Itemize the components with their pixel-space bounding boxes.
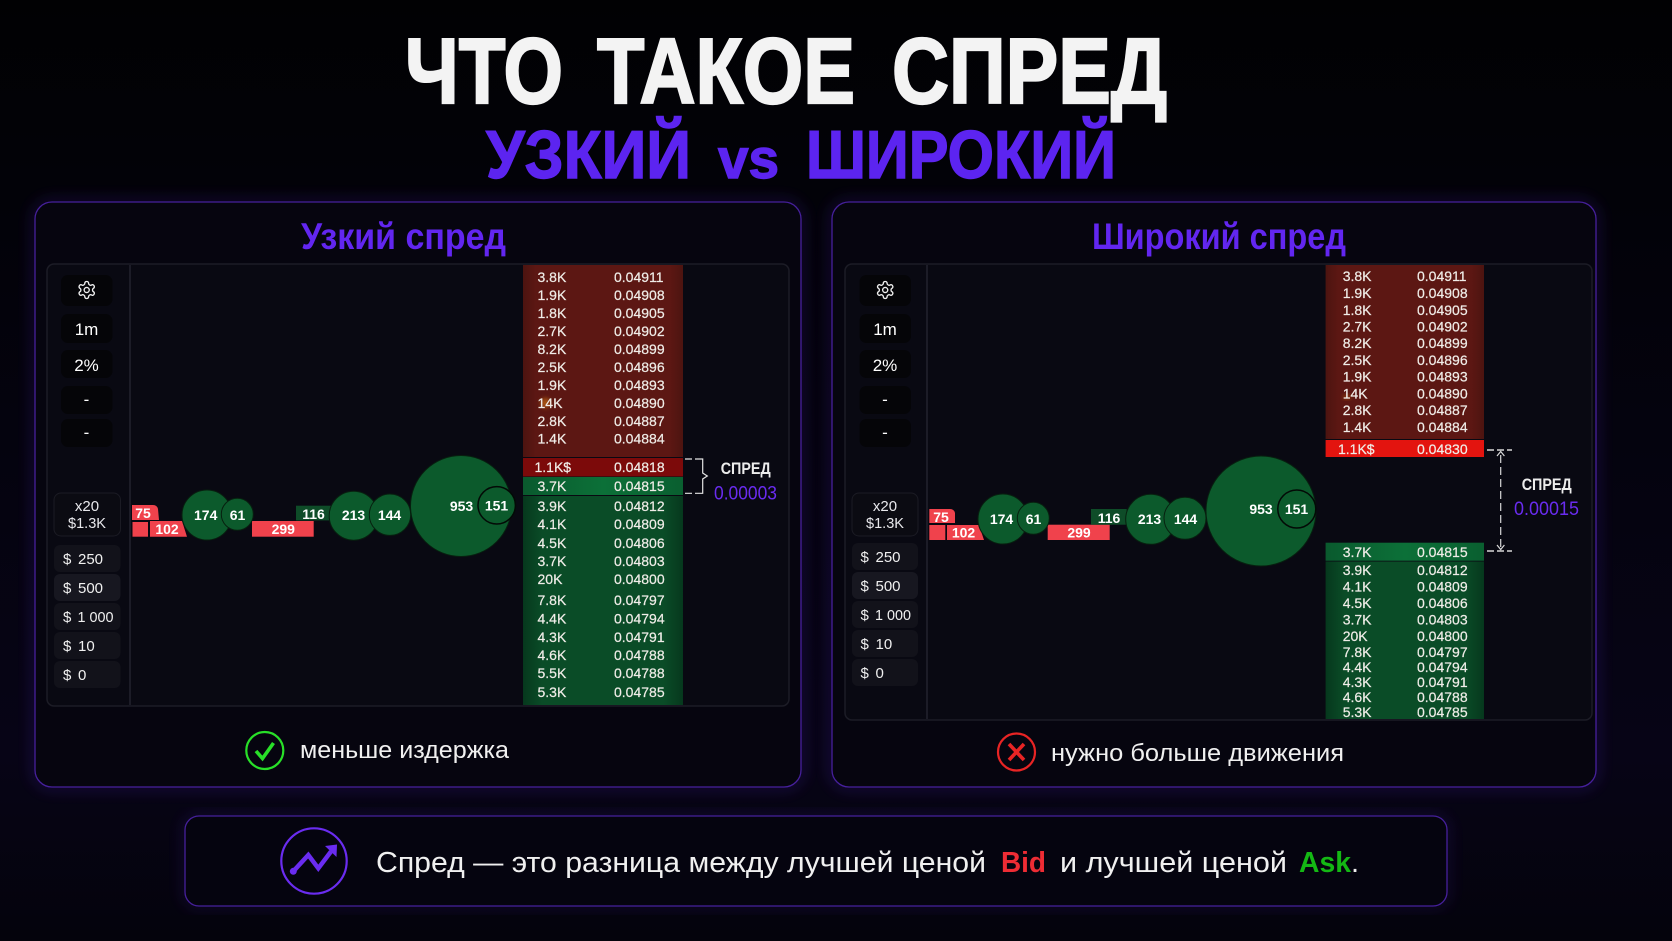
order book: bids: 5.3K	[1343, 704, 1372, 720]
trade bubbles: 144	[1174, 511, 1197, 527]
sidebar controls: 500	[876, 578, 901, 595]
trade bubbles: 116	[302, 506, 325, 522]
order book: asks: 2.7K	[538, 323, 567, 339]
order book: bids: 0.04788	[1417, 689, 1468, 705]
order book: bids: 3.9K	[1343, 562, 1372, 578]
trade bubbles: 299	[1067, 524, 1091, 540]
order book: asks: 0.04896	[1417, 352, 1468, 368]
best bid row: 3.7K	[538, 478, 567, 494]
trade bubbles: 102	[155, 521, 179, 537]
order book: bids: 0.04797	[614, 592, 665, 608]
order book: asks: 0.04896	[614, 359, 665, 375]
order book: bids: 5.5K	[538, 665, 567, 681]
order book: asks: 3.8K	[1343, 268, 1372, 284]
order book: asks: 0.04887	[1417, 402, 1468, 418]
subtitle: УЗКИЙ	[486, 116, 691, 193]
icon: gear	[878, 282, 893, 298]
order book: bids	[1326, 562, 1484, 720]
sidebar controls: 1m	[873, 320, 897, 339]
order book: bids: 0.04809	[614, 516, 665, 532]
trade bubbles	[929, 456, 1316, 566]
definition text: .	[1351, 847, 1359, 879]
heading: narrow spread: Узкий спред	[301, 216, 506, 257]
order book: bids: 0.04812	[614, 498, 665, 514]
icon: check	[246, 732, 283, 769]
order book: asks: 0.04884	[614, 430, 665, 446]
subtitle: vs	[718, 127, 779, 190]
order flow chart: narrow	[47, 264, 789, 706]
best ask row: 0.04818	[614, 459, 665, 475]
order book: asks: 0.04887	[614, 413, 665, 429]
trade bubbles: 213	[1138, 511, 1161, 527]
order book: bids: 0.04803	[614, 553, 665, 569]
order book: bids: 4.1K	[1343, 579, 1372, 595]
sidebar controls: 250	[78, 551, 103, 568]
trade bubbles: 151	[485, 498, 508, 514]
icon: cross	[998, 734, 1035, 770]
order book: asks: 1.9K	[538, 377, 567, 393]
trade bubbles: 174	[990, 511, 1013, 527]
subtitle: ШИРОКИЙ	[806, 116, 1116, 193]
best ask row	[1326, 440, 1484, 457]
order book: asks: 0.04902	[614, 323, 665, 339]
order book: asks: 1.9K	[1343, 369, 1372, 385]
sidebar controls: $	[63, 609, 72, 626]
definition text: Ask	[1299, 847, 1352, 879]
order book: bids: 4.5K	[1343, 595, 1372, 611]
definition bar	[185, 816, 1447, 906]
sidebar controls: x20	[75, 498, 99, 515]
trade bubbles: 144	[378, 507, 401, 523]
definition text: Bid	[1001, 847, 1046, 879]
order book: bids: 7.8K	[1343, 644, 1372, 660]
order book: bids: 3.7K	[1343, 612, 1372, 628]
order book: bids: 20K	[1343, 628, 1368, 644]
order book: bids: 4.4K	[538, 610, 567, 626]
order book: asks: 0.04905	[614, 305, 665, 321]
sidebar controls: 2%	[873, 356, 897, 375]
order book: bids: 0.04791	[614, 629, 665, 645]
sidebar controls: $	[63, 551, 72, 568]
sidebar controls: x20	[873, 498, 897, 515]
trade bubbles: 299	[272, 521, 295, 537]
spread arrow	[1487, 450, 1512, 551]
trade bubbles: 61	[230, 507, 245, 523]
title: ТАКОЕ	[597, 19, 855, 123]
sidebar controls: 10	[78, 638, 95, 655]
order book: asks: 2.8K	[538, 413, 567, 429]
order book: asks: 3.8K	[538, 269, 567, 285]
sidebar controls: 1 000	[78, 609, 114, 626]
trade bubbles: 213	[342, 507, 365, 523]
sidebar controls: -	[882, 390, 888, 409]
order book: asks: 0.04893	[614, 377, 665, 393]
order book: bids: 4.3K	[538, 629, 567, 645]
order book: bids: 0.04803	[1417, 612, 1468, 628]
note: more movement: нужно больше движения	[1051, 740, 1344, 767]
order book: bids: 0.04806	[1417, 595, 1468, 611]
order book: bids	[523, 496, 683, 705]
spread label: СПРЕД	[721, 459, 771, 478]
sidebar controls: $	[63, 667, 72, 684]
order book: asks: 2.5K	[538, 359, 567, 375]
order book: asks: 0.04908	[614, 287, 665, 303]
sidebar controls: -	[882, 423, 888, 442]
order book: asks: 1.4K	[538, 430, 567, 446]
sidebar controls: 0	[876, 665, 884, 682]
sidebar controls: -	[84, 390, 89, 409]
order book: bids: 0.04791	[1417, 674, 1468, 690]
order book: bids: 20K	[538, 571, 563, 587]
order book: asks: 2.5K	[1343, 352, 1372, 368]
best ask row: 1.1K$	[534, 459, 571, 475]
order book: asks	[1326, 265, 1484, 439]
order book: bids: 4.3K	[1343, 674, 1372, 690]
sidebar controls: $	[63, 580, 72, 597]
order book: bids: 0.04785	[614, 684, 665, 700]
trade bubbles: 174	[194, 507, 218, 523]
spread label: 0.00015	[1514, 499, 1579, 520]
sidebar controls: 1m	[75, 320, 98, 339]
order book: bids: 7.8K	[538, 592, 567, 608]
order book: bids: 4.4K	[1343, 659, 1372, 675]
trade bubbles: 75	[933, 509, 949, 525]
title	[405, 19, 1167, 123]
order book: asks: 1.4K	[1343, 419, 1372, 435]
sidebar controls: $	[860, 607, 870, 624]
heading: wide spread: Широкий спред	[1092, 216, 1346, 257]
best bid row	[1326, 543, 1484, 561]
title: ЧТО	[405, 19, 563, 123]
order book: bids: 0.04812	[1417, 562, 1468, 578]
order book: asks: 0.04899	[1417, 335, 1468, 351]
order book: asks: 8.2K	[538, 341, 567, 357]
sidebar controls: $	[860, 578, 870, 595]
trade bubbles: 102	[952, 524, 975, 540]
best bid row: 0.04815	[614, 478, 665, 494]
order book: bids: 0.04797	[1417, 644, 1468, 660]
order flow chart: wide	[845, 264, 1592, 720]
sidebar controls	[54, 275, 120, 688]
order book: bids: 0.04788	[614, 665, 665, 681]
order book: asks: 0.04890	[614, 395, 665, 411]
order book: bids: 0.04788	[614, 647, 665, 663]
sidebar controls: 10	[876, 636, 892, 653]
order book: asks: 0.04893	[1417, 369, 1468, 385]
order book: asks: 14K	[538, 395, 563, 411]
order book: bids: 0.04794	[614, 610, 665, 626]
spread label	[1514, 475, 1579, 520]
definition text	[376, 847, 1359, 879]
trade bubbles: 953	[1249, 501, 1273, 517]
best bid row: 3.7K	[1343, 544, 1372, 560]
best ask row: 1.1K$	[1338, 441, 1375, 457]
spread label	[714, 459, 777, 504]
icon: gear	[79, 282, 94, 298]
order book: asks: 1.9K	[538, 287, 567, 303]
subtitle	[486, 116, 1116, 193]
order book: asks: 0.04911	[614, 269, 664, 285]
order book: asks: 0.04908	[1417, 285, 1468, 301]
order book: bids: 0.04806	[614, 535, 665, 551]
title: СПРЕД	[892, 19, 1167, 123]
sidebar controls: 0	[78, 667, 86, 684]
definition text: и лучшей ценой	[1060, 847, 1287, 879]
spread label: 0.00003	[714, 484, 777, 504]
trade bubbles	[132, 456, 515, 556]
order book: asks: 14K	[1343, 386, 1368, 402]
sidebar controls: $1.3K	[68, 515, 106, 532]
order book: asks: 2.7K	[1343, 318, 1372, 334]
order book: bids: 3.9K	[538, 498, 567, 514]
order book: asks: 0.04899	[614, 341, 665, 357]
trade bubbles: 151	[1285, 501, 1308, 517]
panel: wide spread	[832, 202, 1596, 787]
sidebar controls: 2%	[74, 356, 99, 375]
trade bubbles: 61	[1026, 511, 1041, 527]
order book: bids: 4.5K	[538, 535, 567, 551]
order book: asks: 1.8K	[1343, 302, 1372, 318]
trade bubbles: 75	[135, 505, 151, 521]
sidebar controls: 250	[876, 549, 901, 566]
sidebar controls	[852, 275, 918, 686]
sidebar controls: 500	[78, 580, 103, 597]
panel: narrow spread	[35, 202, 801, 787]
best ask row: 0.04830	[1417, 441, 1468, 457]
order book: bids: 4.6K	[1343, 689, 1372, 705]
note: lower cost: меньше издержка	[300, 737, 510, 764]
sidebar controls: -	[84, 423, 89, 442]
order book: bids: 4.1K	[538, 516, 567, 532]
sidebar controls: $	[860, 636, 870, 653]
order book: asks: 1.8K	[538, 305, 567, 321]
order book: asks: 2.8K	[1343, 402, 1372, 418]
order book: bids: 0.04800	[1417, 628, 1468, 644]
order book: bids: 0.04794	[1417, 659, 1468, 675]
order book: asks: 0.04884	[1417, 419, 1468, 435]
icon: trend arrow	[281, 828, 347, 894]
order book: bids: 4.6K	[538, 647, 567, 663]
order book: bids: 5.3K	[538, 684, 567, 700]
spread label: СПРЕД	[1522, 475, 1572, 494]
sidebar controls: $1.3K	[866, 515, 904, 532]
definition text: Спред — это разница между лучшей ценой	[376, 847, 986, 879]
order book: asks: 0.04905	[1417, 302, 1468, 318]
order book: asks: 8.2K	[1343, 335, 1372, 351]
order book: bids: 0.04809	[1417, 579, 1468, 595]
trade bubbles: 116	[1098, 510, 1121, 526]
order book: asks: 0.04890	[1417, 386, 1468, 402]
order book: asks	[523, 265, 683, 457]
order book: bids: 3.7K	[538, 553, 567, 569]
sidebar controls: $	[860, 549, 870, 566]
best ask row	[523, 458, 683, 476]
sidebar controls: $	[860, 665, 870, 682]
sidebar controls: 1 000	[875, 607, 911, 624]
spread brace	[685, 459, 707, 493]
order book: bids: 0.04785	[1417, 704, 1468, 720]
best bid row: 0.04815	[1417, 544, 1468, 560]
order book: asks: 1.9K	[1343, 285, 1372, 301]
best bid row	[523, 477, 683, 495]
order book: asks: 0.04902	[1417, 318, 1468, 334]
trade bubbles: 953	[450, 498, 473, 514]
order book: asks: 0.04911	[1417, 268, 1467, 284]
sidebar controls: $	[63, 638, 72, 655]
order book: bids: 0.04800	[614, 571, 665, 587]
